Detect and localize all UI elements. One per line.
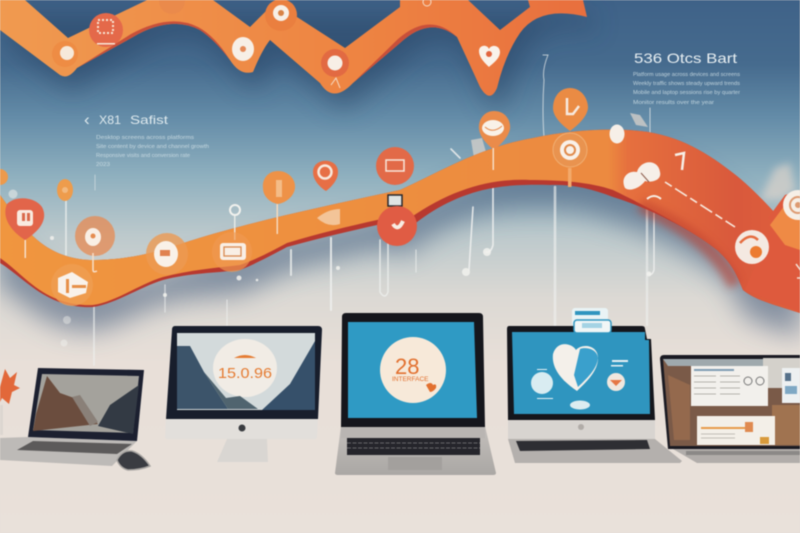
laptop 3 xyxy=(335,313,496,475)
main ribbon shadow xyxy=(0,154,800,337)
main ribbon xyxy=(0,130,800,313)
flower and vase xyxy=(0,369,20,435)
left body text: Desktop screens across platforms xyxy=(96,135,195,141)
scattered dots xyxy=(8,190,652,346)
laptop 3 screen xyxy=(348,322,477,418)
right body text xyxy=(633,72,741,106)
main ribbon pins xyxy=(0,88,800,346)
top ribbon pins xyxy=(52,0,500,88)
laptop 3 screen: 28 xyxy=(395,354,419,379)
centre pins xyxy=(146,147,417,275)
laptop 5 xyxy=(660,355,800,463)
monitor screen: 15.0.96 xyxy=(218,365,272,382)
desktop monitor xyxy=(165,326,322,462)
chat tag xyxy=(572,308,611,333)
right body text: Weekly traffic shows steady upward trends xyxy=(633,81,741,87)
connector lines xyxy=(66,55,654,365)
left body text: Responsive visits and conversion rate xyxy=(96,153,190,159)
left body text: Site content by device and channel growth xyxy=(96,144,209,150)
left heading: X81 xyxy=(99,113,121,127)
top zigzag ribbon xyxy=(0,0,587,96)
right body text: Platform usage across devices and screens xyxy=(633,72,741,78)
right pins xyxy=(479,88,800,278)
monitor screen xyxy=(177,333,315,410)
pale accent shapes behind ribbon xyxy=(471,113,795,200)
right body text: Monitor results over the year xyxy=(633,100,714,106)
right heading: 536 Otcs Bart xyxy=(634,50,737,66)
dashed route line xyxy=(665,182,735,227)
mouse xyxy=(117,451,150,470)
left pins xyxy=(0,169,115,306)
laptop 1 xyxy=(0,368,150,470)
laptop 5 screen xyxy=(663,358,800,446)
right body text: Mobile and laptop sessions rise by quarter xyxy=(633,90,740,96)
laptop 3 screen: INTERFACE xyxy=(392,376,429,383)
left body text: 2023 xyxy=(96,162,110,168)
left heading: ‹ xyxy=(84,110,90,129)
left heading: Safist xyxy=(130,113,169,127)
left heading xyxy=(84,110,169,129)
laptop 4 screen xyxy=(512,332,650,414)
top ribbon shadow xyxy=(8,14,595,110)
laptop 4 xyxy=(507,308,682,463)
left body text xyxy=(96,135,209,168)
laptop 1 screen landscape xyxy=(33,374,139,434)
